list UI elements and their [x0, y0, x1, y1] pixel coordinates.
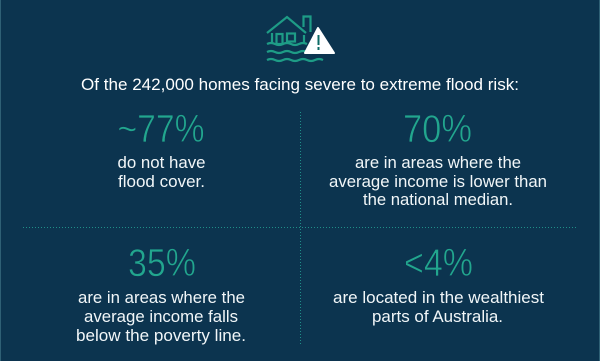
stat: income below national median: the national median. — [363, 191, 513, 209]
stat: do not have flood cover — [118, 108, 206, 191]
icon: flooded house with warning triangle — [267, 16, 334, 61]
stat: income below national median — [329, 108, 547, 209]
stat: income below poverty line: average income falls — [84, 308, 238, 326]
stat: do not have flood cover: ~77% — [118, 108, 204, 151]
stat: income below national median: average income is lower than — [329, 173, 547, 191]
stat: wealthiest parts of Australia — [333, 242, 544, 326]
stat: income below poverty line: below the poverty line. — [76, 327, 246, 345]
stat: do not have flood cover: do not have — [118, 154, 206, 172]
stat: wealthiest parts of Australia: parts of Australia. — [372, 308, 503, 326]
stat: wealthiest parts of Australia: are located in the wealthiest — [333, 289, 544, 307]
stat: income below poverty line: 35% — [128, 242, 196, 285]
dotted dividers — [23, 226, 578, 228]
stat: do not have flood cover: flood cover. — [118, 173, 205, 191]
heading: Of the 242,000 homes facing severe to extreme flood risk: — [81, 76, 519, 94]
stat: income below poverty line — [76, 242, 246, 345]
stat: income below national median: are in areas where the — [355, 154, 521, 172]
stat: income below poverty line: are in areas where the — [78, 289, 245, 307]
stat: income below national median: 70% — [403, 108, 472, 151]
stat: wealthiest parts of Australia: <4% — [404, 242, 473, 285]
